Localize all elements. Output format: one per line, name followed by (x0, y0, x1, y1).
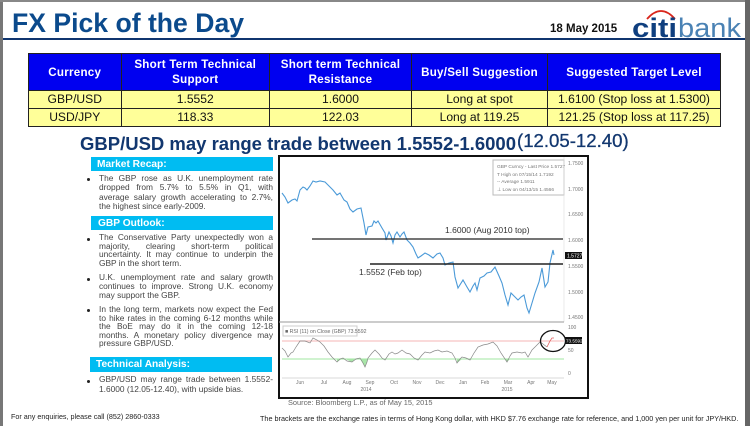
panel: gbp outlook: majority, clearing short-term political (99, 241, 273, 251)
data table: 1.5552 (177, 92, 214, 106)
bullet text (87, 232, 273, 348)
data table: Support (172, 73, 218, 86)
panel: gbp outlook: to hike rates in the coming 6-12 months while (99, 313, 273, 323)
time axis: Mar (504, 380, 513, 386)
price line (282, 181, 554, 313)
heading: market recap (91, 157, 273, 171)
rsi latest segment (547, 338, 554, 347)
chart legend: T High on 07/15/14 1.7192 (497, 172, 554, 178)
data table: Short Term Technical (134, 58, 256, 71)
heading: technical analysis (90, 357, 272, 372)
enquiries line: For any enquiries, please call (852) 2860-0333 (11, 412, 160, 421)
chart legend: GBP Curncy - Last Price 1.5727 (497, 164, 565, 170)
price axis: 1.7000 (568, 187, 584, 193)
data table: Long at 119.25 (440, 110, 519, 124)
rsi legend (283, 326, 367, 336)
price axis (564, 157, 584, 322)
panel: market recap: average salary growth accelerating to 2.7%, (99, 192, 273, 202)
panel: market recap: dropped from 5.7% to 5.5% in Q1, with (99, 182, 273, 192)
bullet text (87, 374, 273, 394)
panel: gbp outlook: uncertainty. It may continue to underpin the (99, 249, 273, 259)
data table: USD/JPY (49, 110, 100, 124)
panel: technical analysis (87, 357, 273, 394)
time axis: Sep (366, 380, 375, 386)
panel: technical analysis: GBP/USD may range trade between 1.5552- (99, 374, 273, 384)
panel: market recap (87, 157, 273, 211)
data table: Resistance (309, 73, 372, 86)
data table: Long at spot (446, 92, 513, 106)
panel: gbp outlook: months. A monetary policy divergence may (99, 330, 273, 340)
data table (28, 53, 721, 127)
highlight circle (540, 330, 566, 352)
panel: gbp outlook: In the long term, markets now expect the Fed (99, 304, 273, 314)
heading: gbp outlook (91, 216, 273, 230)
time axis: Apr (527, 380, 535, 386)
data table: GBP/USD (48, 92, 102, 106)
heading: market recap: Market Recap: (97, 159, 167, 170)
chart: GBP/USD price and RSI (278, 155, 589, 399)
data table: 118.33 (177, 110, 213, 124)
heading: technical analysis: Technical Analysis: (96, 359, 190, 370)
page frame top edge (0, 0, 750, 2)
panel: gbp outlook: The Conservative Party unexpectedly won a (99, 232, 273, 242)
price axis: 1.4500 (568, 315, 584, 321)
rsi oversold fill (337, 358, 510, 367)
panel: market recap: the highest since early-2009. (99, 201, 206, 211)
time axis: Aug (343, 380, 352, 386)
price axis: 1.5500 (568, 264, 584, 270)
price axis: 1.7500 (568, 161, 584, 167)
rsi legend: ■ RSI (11) on Close (GBP) 73.5592 (285, 329, 367, 335)
data table: Currency (48, 66, 101, 78)
citibank logo (632, 10, 742, 38)
header rule (3, 38, 745, 40)
date: 18 May 2015 (550, 23, 617, 35)
panel: gbp outlook: the BoE may do it in the coming 12-18 (99, 321, 273, 331)
support line 1.5552 (370, 263, 563, 265)
panel: gbp outlook: pressure GBP/USD. (99, 338, 174, 348)
data table: Suggested Target Level (566, 66, 702, 78)
page frame right edge (745, 0, 750, 426)
time axis: Oct (390, 380, 398, 386)
page frame left edge (0, 0, 3, 426)
panel: market recap: The GBP rose as U.K. unemployment rate (99, 173, 273, 183)
rsi overbought line (282, 340, 564, 342)
resistance line 1.6000 (312, 238, 563, 240)
chart legend: ⊥ Low on 04/13/15 1.4566 (497, 187, 554, 193)
footnote: The brackets are the exchange rates in terms of Hong Kong dollar, with HKD $7.76 exchange rate for reference, and 1,000 yen per unit for JPY/HKD. (260, 414, 738, 423)
panel: gbp outlook (87, 216, 273, 348)
panel: gbp outlook: may support the GBP. (99, 290, 180, 300)
price axis: 1.6000 (568, 238, 584, 244)
heading: gbp outlook: GBP Outlook: (98, 218, 165, 229)
time axis: Jul (321, 380, 327, 386)
rsi value tag: 73.5592 (566, 338, 583, 344)
heading hong kong dollar range: (12.05-12.40) (517, 130, 629, 151)
data table: 122.03 (322, 110, 359, 124)
main heading: GBP/USD may range trade between 1.5552-1.6000 (80, 133, 516, 154)
chart legend: -- Average 1.5911 (497, 179, 535, 185)
rsi axis: 50 (568, 348, 574, 354)
rsi line (282, 338, 547, 367)
panel: gbp outlook: GBP in the short term. (99, 258, 181, 268)
time axis: 2015 (501, 387, 513, 393)
rsi oversold line (282, 358, 564, 360)
rsi axis: 0 (568, 371, 571, 377)
price axis: 1.6500 (568, 212, 584, 218)
bullet text (87, 173, 273, 211)
time axis: Nov (413, 380, 422, 386)
price axis: 1.5000 (568, 290, 584, 296)
time axis: Dec (436, 380, 445, 386)
rsi axis (568, 325, 577, 377)
panel: gbp outlook: continues to improve. Strong U.K. economy (99, 281, 273, 291)
panel: technical analysis: 1.6000 (12.05-12.40), with upside bias. (99, 384, 243, 394)
data table: 1.6000 (322, 92, 359, 106)
data table: Buy/Sell Suggestion (421, 66, 538, 78)
rsi value tag (565, 337, 583, 344)
rsi axis: 100 (568, 325, 577, 331)
data table: 1.6100 (Stop loss at 1.5300) (558, 92, 710, 106)
time axis: Jun (296, 380, 304, 386)
resistance label: 1.6000 (Aug 2010 top) (445, 225, 530, 235)
time axis: Feb (481, 380, 490, 386)
support label: 1.5552 (Feb top) (359, 267, 422, 277)
time axis: Jan (459, 380, 467, 386)
data table: Short term Technical (281, 58, 400, 71)
title: FX Pick of the Day (12, 8, 244, 38)
last price tag (565, 252, 583, 260)
time axis: 2014 (360, 387, 372, 393)
panel: gbp outlook: U.K. unemployment rate and salary growth (99, 272, 273, 282)
data table: 121.25 (Stop loss at 117.25) (558, 110, 710, 124)
chart legend (493, 160, 565, 195)
time axis: May (547, 380, 557, 386)
time axis (282, 378, 564, 393)
pane separator (279, 321, 564, 323)
source note: Source: Bloomberg L.P., as of May 15, 2015 (288, 398, 432, 407)
last price tag: 1.5727 (567, 254, 583, 260)
